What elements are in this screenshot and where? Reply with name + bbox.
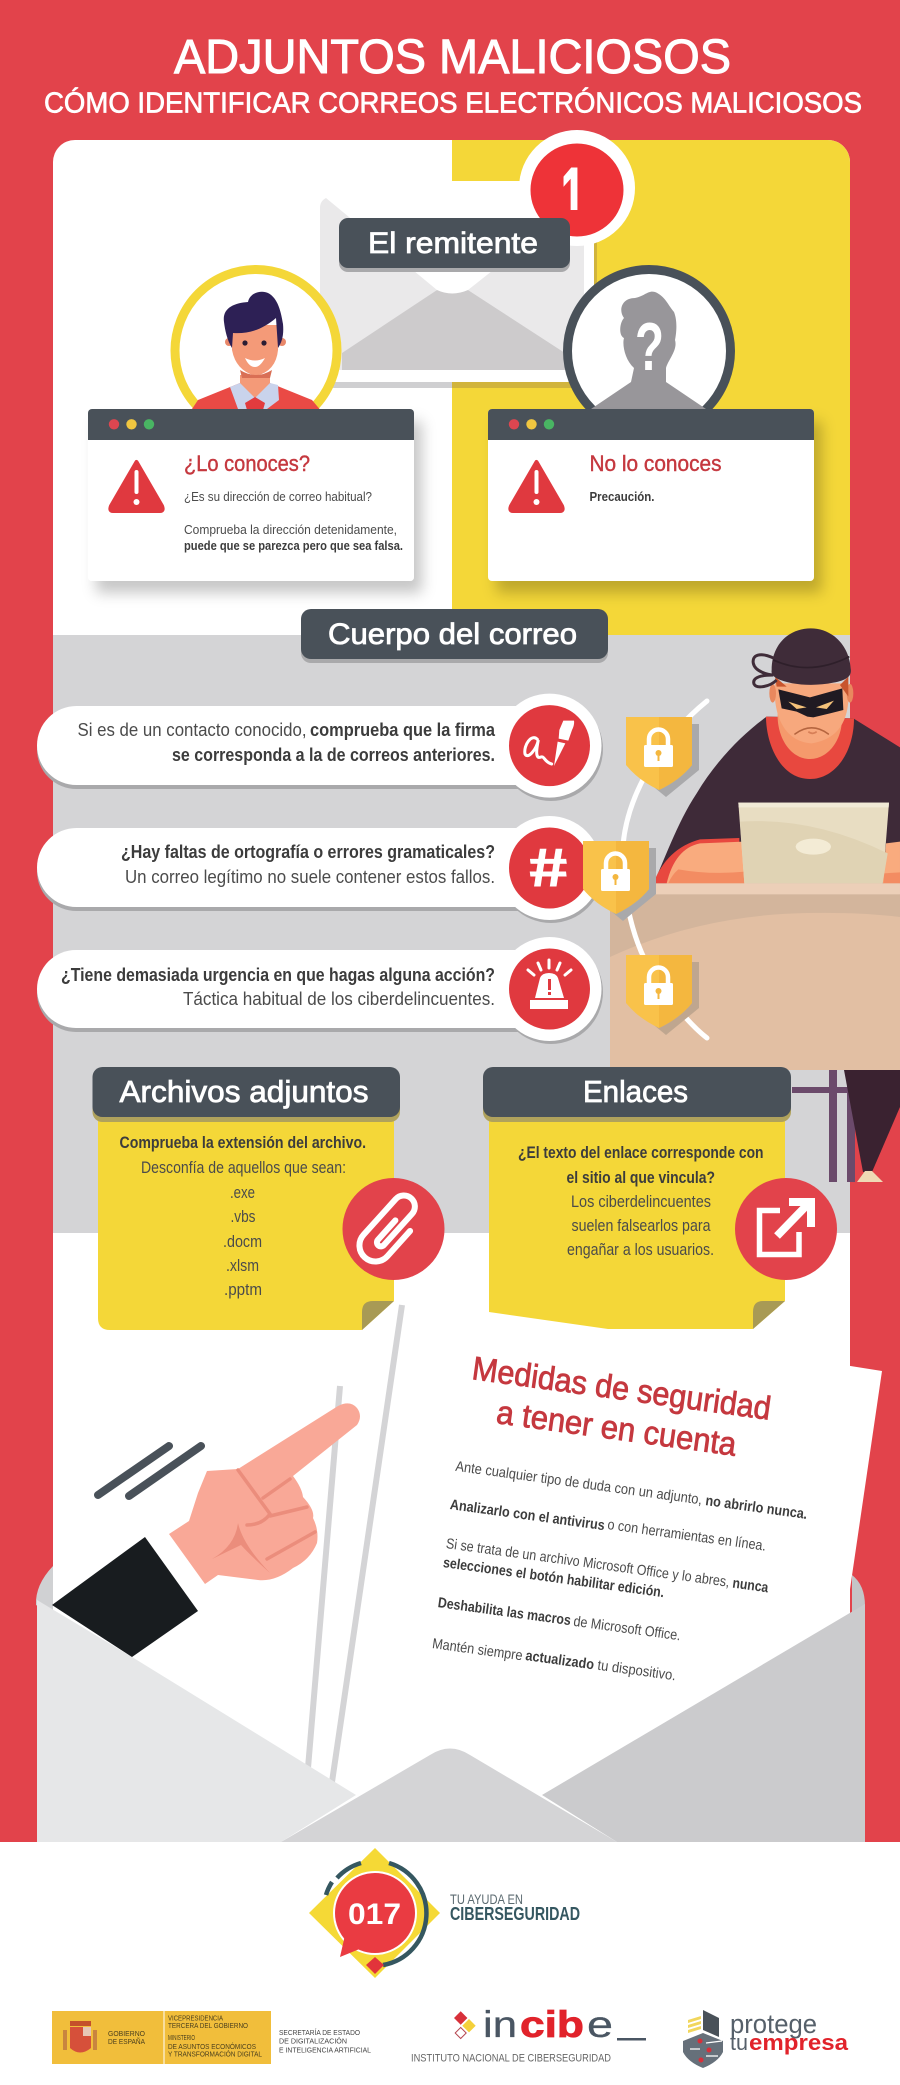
panel: firma: se corresponda a la de correos anteriores.	[172, 744, 495, 765]
panel: archivos adjuntos: .xlsm	[226, 1256, 259, 1275]
panel: ortografia: ¿Hay faltas de ortografía o errores gramaticales?	[121, 841, 495, 862]
text: security measures: actualizado	[524, 1648, 595, 1673]
icon: hash: #	[525, 838, 571, 898]
thief figure	[653, 628, 900, 894]
panel: archivos adjuntos	[92, 1067, 444, 1330]
logo: 017 helpline: CIBERSEGURIDAD	[450, 1904, 580, 1924]
logo: incibe: in	[483, 2004, 517, 2045]
yellow note	[98, 1117, 394, 1330]
logo: gobierno de espana: Y TRANSFORMACIÓN DIGITAL	[168, 2050, 262, 2059]
panel: window lo conoces	[88, 409, 414, 581]
panel: archivos adjuntos: .exe	[230, 1183, 255, 1202]
icon: alarm beacon	[509, 948, 590, 1030]
icon: shield lock 2	[583, 841, 656, 921]
panel: urgencia: Táctica habitual de los ciberdelincuentes.	[183, 988, 495, 1009]
panel: window no lo conoces	[488, 409, 814, 581]
panel: firma	[37, 694, 603, 801]
panel: window lo conoces: puede que se parezca pero que sea falsa.	[184, 539, 403, 553]
icon: unknown person	[568, 270, 730, 432]
panel: archivos adjuntos: .docm	[223, 1232, 262, 1251]
panel: enlaces: suelen falsearlos para	[572, 1216, 711, 1235]
icon: warning triangle	[510, 462, 563, 511]
panel: window no lo conoces: No lo conoces	[590, 451, 722, 476]
panel: archivos adjuntos: Comprueba la extensión del archivo.	[120, 1133, 366, 1152]
logo: gobierno de espana: E INTELIGENCIA ARTIFICIAL	[279, 2046, 371, 2055]
text: security measures: Ante cualquier tipo de duda con un adjunto,	[454, 1459, 703, 1508]
panel: urgencia	[37, 937, 603, 1044]
panel: window lo conoces: ¿Lo conoces?	[184, 451, 310, 476]
icon: shield lock 3	[626, 955, 699, 1035]
panel: ortografia	[37, 816, 603, 923]
yellow note	[489, 1117, 785, 1329]
text: security measures: selecciones el botón habilitar edición.	[442, 1555, 665, 1601]
logo: protege tu empresa: protege	[730, 2009, 817, 2039]
logo: protege tu empresa: tu	[730, 2030, 748, 2055]
panel: archivos adjuntos: Desconfía de aquellos que sean:	[141, 1158, 346, 1177]
logo: incibe: e	[587, 2004, 613, 2045]
curved connector line	[622, 701, 707, 1038]
logo: 017 helpline: 017	[348, 1898, 401, 1931]
logo: gobierno de espana: GOBIERNO	[108, 2029, 145, 2038]
panel: archivos adjuntos: .vbs	[230, 1207, 256, 1226]
logo: gobierno de espana: TERCERA DEL GOBIERNO	[168, 2021, 248, 2030]
heading	[92, 1067, 400, 1122]
panel: enlaces: Los ciberdelincuentes	[571, 1192, 711, 1211]
icon: unknown person: ?	[635, 309, 664, 385]
logo: 017 helpline: TU AYUDA EN	[450, 1891, 523, 1907]
text: security measures: de Microsoft Office.	[572, 1614, 682, 1644]
panel: firma: comprueba que la firma	[310, 719, 496, 740]
icon: notification badge	[519, 130, 635, 246]
logo: gobierno de espana: SECRETARÍA DE ESTADO	[279, 2028, 360, 2037]
icon: coat of arms	[63, 2021, 97, 2052]
logo: 017 helpline	[309, 1848, 580, 1978]
icon: envelope	[320, 181, 597, 388]
envelope back	[36, 1566, 865, 1625]
panel: enlaces: ¿El texto del enlace corresponde con	[518, 1143, 764, 1162]
icon: shield lock 1	[626, 717, 699, 797]
panel: firma: Si es de un contacto conocido,	[78, 719, 306, 740]
letter paper	[700, 1358, 882, 1630]
letter fold lines	[308, 1305, 402, 1782]
text: security measures: Deshabilita las macros	[437, 1595, 572, 1629]
text: security measures: tu dispositivo.	[596, 1658, 677, 1684]
heading	[483, 1067, 791, 1122]
panel: enlaces	[483, 1067, 837, 1329]
text: security measures: o con herramientas en línea.	[606, 1517, 767, 1555]
desk	[610, 893, 900, 1070]
envelope flaps	[37, 1600, 865, 1842]
panel: window no lo conoces: Precaución.	[590, 490, 654, 504]
legs under desk	[792, 1070, 900, 1182]
logo: incibe: cib	[520, 2004, 584, 2045]
panel: main backgrounds	[53, 140, 850, 1842]
icon: warning triangle	[110, 462, 163, 511]
heading: medidas de seguridad: Medidas de seguridad	[470, 1349, 773, 1427]
panel: envelope and letter	[36, 1305, 882, 1842]
icon: pointing hand	[52, 1403, 360, 1657]
heading: cuerpo del correo: Cuerpo del correo	[328, 618, 577, 651]
panel: window lo conoces: ¿Es su dirección de correo habitual?	[184, 490, 372, 504]
illustration: thief at desk	[610, 628, 900, 1182]
heading: Archivos adjuntos	[120, 1074, 368, 1109]
logo: gobierno de espana: DE ESPAÑA	[108, 2037, 145, 2046]
title: CÓMO IDENTIFICAR CORREOS ELECTRÓNICOS MALICIOSOS	[44, 86, 862, 120]
title: ADJUNTOS MALICIOSOS	[174, 31, 731, 84]
icon: hash	[509, 828, 590, 908]
logo: gobierno de espana: VICEPRESIDENCIA	[168, 2014, 223, 2023]
panel: enlaces: engañar a los usuarios.	[567, 1240, 714, 1259]
title	[44, 31, 862, 120]
text: security measures: Mantén siempre	[431, 1636, 523, 1664]
heading: cuerpo del correo	[301, 609, 608, 663]
logo: protege tu empresa	[683, 2009, 849, 2068]
icon: notification badge: 1	[561, 151, 585, 239]
panel: el remitente	[88, 130, 814, 581]
panel: archivos adjuntos: .pptm	[224, 1280, 262, 1299]
icon: known person	[175, 270, 337, 432]
logo: incibe	[411, 2004, 646, 2065]
heading: Enlaces	[583, 1074, 688, 1109]
logo: gobierno de espana: DE DIGITALIZACIÓN	[279, 2036, 347, 2046]
text: security measures: Si se trata de un archivo Microsoft Office y lo abres,	[445, 1536, 730, 1591]
panel: ortografia: Un correo legítimo no suele contener estos fallos.	[125, 866, 495, 887]
logo: gobierno de espana: DE ASUNTOS ECONÓMICOS	[168, 2042, 256, 2051]
logo: gobierno de espana	[52, 2011, 371, 2064]
logo: gobierno de espana: MINISTERIO	[168, 2033, 195, 2042]
text: security measures	[431, 1459, 808, 1684]
panel: urgencia: ¿Tiene demasiada urgencia en que hagas alguna acción?	[61, 964, 495, 985]
icon: external link	[735, 1178, 837, 1280]
panel: window lo conoces: Comprueba la dirección detenidamente,	[184, 523, 397, 537]
text: security measures: no abrirlo nunca.	[704, 1493, 808, 1523]
logo: protege tu empresa: empresa	[749, 2030, 849, 2055]
heading: medidas de seguridad	[470, 1349, 773, 1463]
heading: el remitente	[339, 218, 570, 272]
logo: incibe: INSTITUTO NACIONAL DE CIBERSEGURIDAD	[411, 2053, 611, 2065]
icon: paperclip	[342, 1178, 444, 1280]
heading: el remitente: El remitente	[368, 227, 538, 260]
panel: enlaces: el sitio al que vincula?	[566, 1168, 715, 1187]
text: security measures: nunca	[731, 1576, 770, 1596]
heading: medidas de seguridad: a tener en cuenta	[494, 1393, 739, 1463]
text: security measures: Analizarlo con el antivirus	[449, 1497, 606, 1534]
icon: signature	[509, 705, 590, 786]
